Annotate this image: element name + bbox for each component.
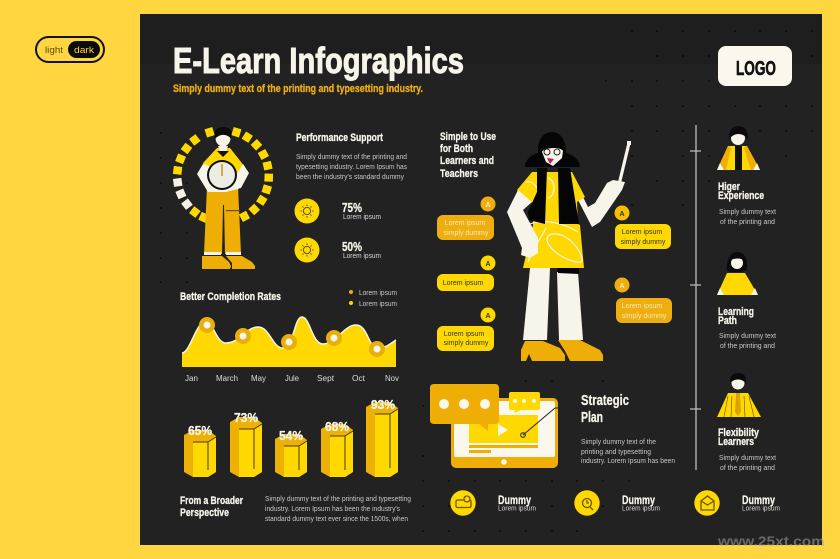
section: from a broader perspective: From a Broader <box>180 495 244 507</box>
callout: top left: simply dummy <box>444 230 489 237</box>
bar chart: hexagonal prisms: 54% <box>279 428 303 443</box>
callout: top left: Lorem ipsum <box>445 220 485 227</box>
section: strategic plan: Simply dummy text of the <box>581 439 656 446</box>
illustration: learner one <box>717 126 760 170</box>
callout: bottom left: Lorem ipsum <box>444 331 484 338</box>
area chart: Nov <box>385 374 399 383</box>
logo badge: LOGO <box>736 58 776 80</box>
heading: simple to use <box>440 131 496 180</box>
text: learning path: Learning <box>718 306 754 318</box>
stat: 75% <box>294 198 381 224</box>
section: performance support: Performance Support <box>296 132 383 144</box>
text: higer experience: Simply dummy text <box>719 209 776 216</box>
icon: projector <box>450 490 476 516</box>
callout: top right: Lorem ipsum <box>622 229 662 236</box>
text: flexibility learners: Simply dummy text <box>719 455 776 462</box>
section: from a broader perspective: industry. Lorem Ipsum has been the industry's <box>265 506 400 513</box>
stat label: dummy one <box>498 493 536 512</box>
text: higer experience: of the printing and <box>720 219 775 226</box>
section: from a broader perspective: Perspective <box>180 507 229 519</box>
legend: Lorem ipsum <box>359 290 397 297</box>
text: learning path: Simply dummy text <box>719 333 776 340</box>
bar chart: hexagonal prisms: 68% <box>325 419 349 434</box>
callout: top left <box>437 196 496 240</box>
area chart: Jule <box>285 374 300 383</box>
area chart: Sept <box>317 374 335 383</box>
text: flexibility learners <box>718 427 776 472</box>
toggle: light / dark: dark <box>74 45 95 55</box>
illustration: learner two <box>717 252 758 295</box>
callout: middle left <box>437 256 496 291</box>
icon: envelope <box>694 490 720 516</box>
section: performance support <box>296 132 407 181</box>
callout: bottom right: A <box>619 283 625 290</box>
watermark: www.25xt.com <box>717 533 825 549</box>
bar chart: hexagonal prisms: 93% <box>371 397 395 412</box>
stat: 50%: Lorem ipsum <box>343 253 381 260</box>
subtitle: Simply dummy text of the printing and typesetting industry. <box>173 83 423 95</box>
stat: 50% <box>294 238 381 262</box>
stat label: dummy two: Lorem ipsum <box>622 506 660 512</box>
callout: top left: A <box>485 202 491 209</box>
title: E-Learn Infographics <box>173 40 464 81</box>
section: strategic plan: Strategic <box>581 392 629 409</box>
text: higer experience: Experience <box>718 190 764 202</box>
section: strategic plan: industry. Lorem Ipsum has been <box>581 458 675 465</box>
callout: bottom right: Lorem ipsum <box>622 303 662 310</box>
stat: 75%: 75% <box>342 200 362 215</box>
text: flexibility learners: Flexibility <box>718 427 760 439</box>
text: flexibility learners: Learners <box>718 436 754 448</box>
stat label: dummy two: Dummy <box>622 493 655 507</box>
area chart: Jan <box>185 374 198 383</box>
heading: simple to use: Teachers <box>440 168 478 180</box>
bar chart: hexagonal prisms: 73% <box>234 410 258 425</box>
section: performance support: typesetting industry. Lorem Ipsum has <box>296 164 407 171</box>
section: strategic plan <box>581 392 675 465</box>
stat: 75%: Lorem ipsum <box>343 214 381 221</box>
area chart: March <box>216 374 238 383</box>
callout: top right: A <box>619 211 625 218</box>
heading: simple to use: for Both <box>440 143 473 155</box>
stat label: dummy two <box>622 493 660 512</box>
icon: clock search <box>574 490 600 516</box>
text: learning path: Path <box>718 315 737 327</box>
heading: better completion rates: Better Completion Rates <box>180 291 281 303</box>
text: learning path <box>718 306 776 350</box>
callout: middle left: A <box>485 261 491 268</box>
illustration: learner three <box>717 373 761 417</box>
section: strategic plan: Plan <box>581 409 603 426</box>
callout: bottom right: simply dummy <box>622 313 667 320</box>
stat label: dummy three: Lorem ipsum <box>742 506 780 512</box>
heading: simple to use: Learners and <box>440 155 494 167</box>
toggle: light / dark <box>36 37 104 62</box>
text: higer experience: Higer <box>718 181 741 193</box>
heading: simple to use: Simple to Use <box>440 131 496 143</box>
area chart: May <box>251 374 266 383</box>
illustration: man with clock and progress ring <box>173 127 273 269</box>
toggle: light / dark: light <box>45 45 64 55</box>
bar chart: hexagonal prisms: 65% <box>188 423 212 438</box>
callout: top right <box>614 206 671 249</box>
legend: Lorem ipsum <box>359 301 397 308</box>
callout: middle left: Lorem ipsum <box>443 280 483 287</box>
section: from a broader perspective <box>180 495 411 523</box>
legend <box>349 290 397 308</box>
section: strategic plan: printing and typesetting <box>581 449 651 456</box>
panel: dark background <box>140 14 822 545</box>
illustration: teacher with pointer <box>507 132 631 361</box>
section: from a broader perspective: standard dummy text ever since the 1500s, when <box>265 516 408 523</box>
section: performance support: Simply dummy text of the printing and <box>296 154 407 161</box>
stat label: dummy one: Dummy <box>498 493 531 507</box>
area chart: Oct <box>352 374 366 383</box>
text: higer experience <box>718 181 776 226</box>
text: learning path: of the printing and <box>720 343 775 350</box>
stat label: dummy three <box>742 493 780 512</box>
callout: top right: simply dummy <box>621 239 666 246</box>
logo badge <box>718 46 792 86</box>
text: flexibility learners: of the printing and <box>720 465 775 472</box>
bar chart: hexagonal prisms <box>184 397 398 477</box>
stat: 50%: 50% <box>342 239 362 254</box>
stat label: dummy one: Lorem ipsum <box>498 506 536 512</box>
section: performance support: been the industry's standard dummy <box>296 174 404 181</box>
callout: bottom right <box>614 278 672 323</box>
section: from a broader perspective: Simply dummy text of the printing and typesetting <box>265 496 411 503</box>
callout: bottom left: simply dummy <box>444 340 489 347</box>
stat label: dummy three: Dummy <box>742 493 775 507</box>
timeline <box>690 125 701 470</box>
callout: bottom left <box>437 308 496 351</box>
area chart <box>182 317 399 383</box>
callout: bottom left: A <box>485 313 491 320</box>
illustration: video monitor with chat bubbles <box>430 384 568 468</box>
